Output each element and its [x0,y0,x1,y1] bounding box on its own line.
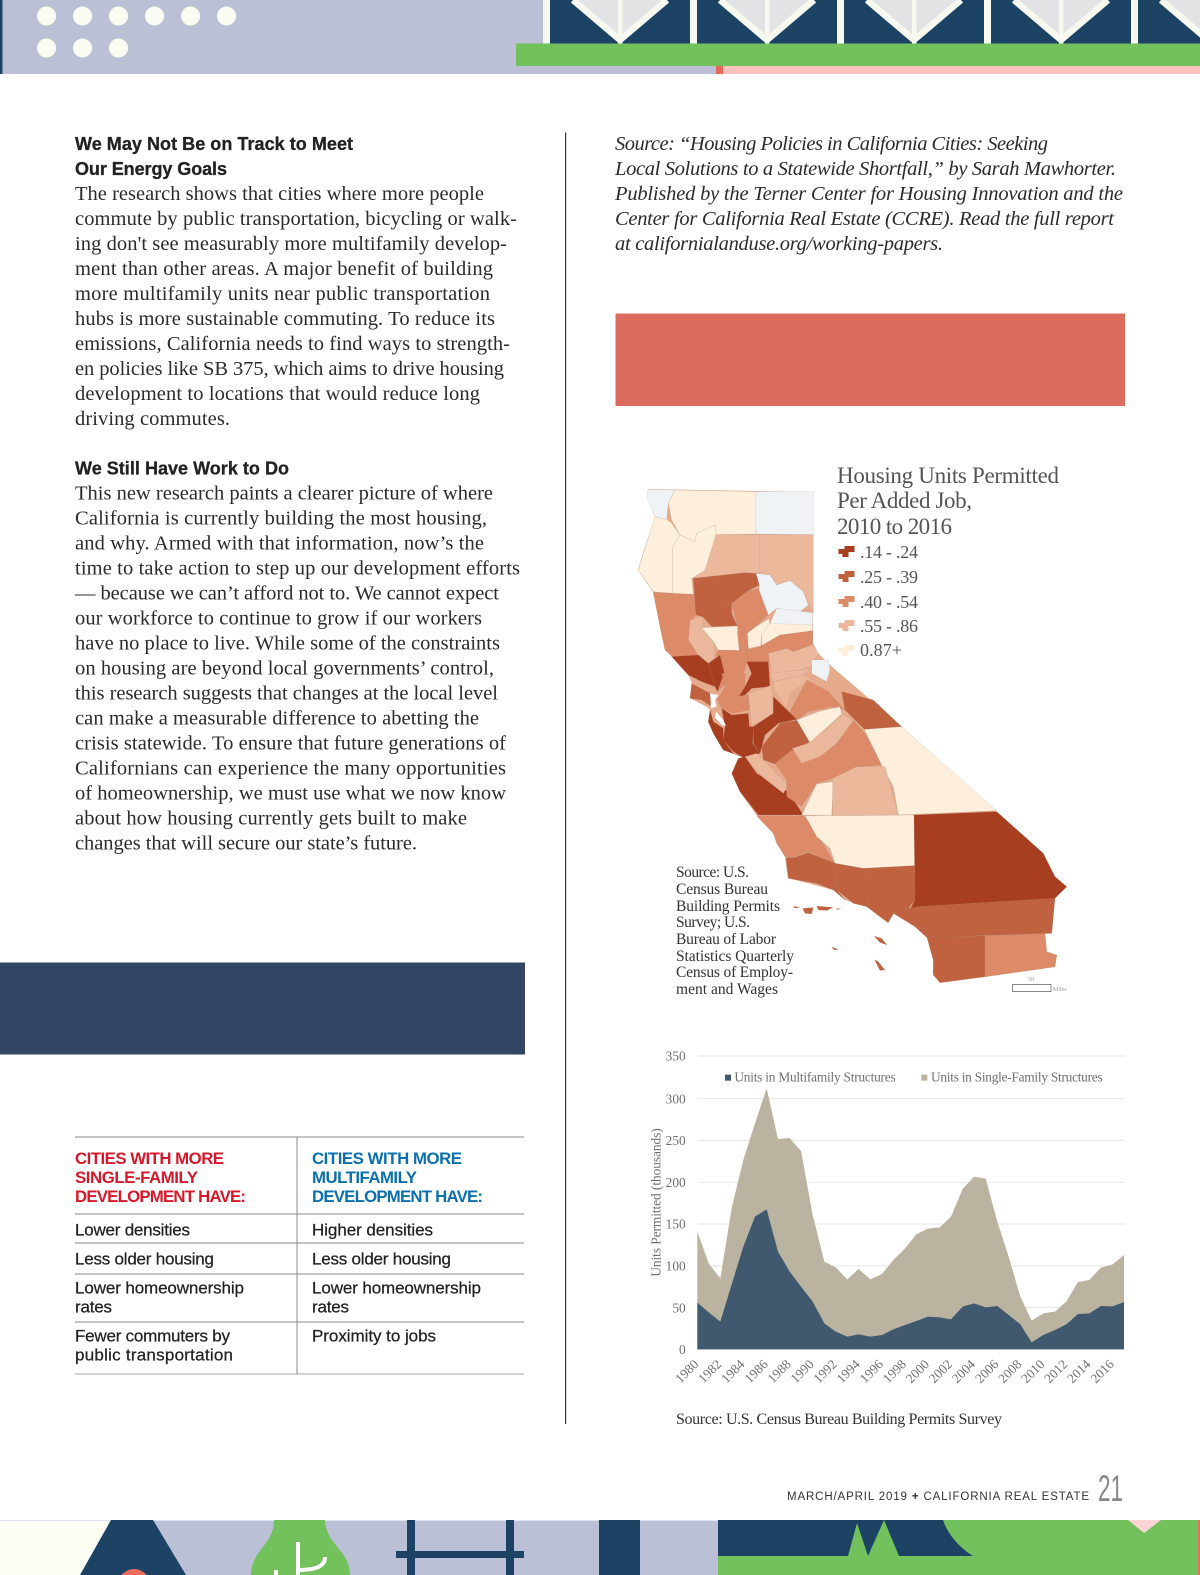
x axis labels: 2010 [1018,1356,1048,1386]
multifamily area [697,1209,1124,1349]
map title [837,463,1060,539]
southern counties [757,692,1067,983]
folio line [787,1468,1123,1509]
article column: energy goals: We May Not Be on Track to Meet [75,134,353,154]
article column: work to do: crisis statewide. To ensure that future generations of [75,732,506,754]
map title: Housing Units Permitted [837,463,1060,488]
x axis labels [672,1356,1117,1386]
article column: work to do: about how housing currently gets built to make [75,808,467,830]
map legend: .40 - .54 [860,592,918,612]
California county map [638,489,1067,983]
y axis title: Units Permitted (thousands) [649,1128,664,1277]
x axis labels: 1996 [857,1356,886,1386]
chart legend: Units in Single-Family Structures [931,1070,1103,1085]
article column: energy goals: driving commutes. [75,408,230,430]
article column: energy goals: Our Energy Goals [75,159,227,179]
article column: energy goals: emissions, California needs to find ways to strength- [75,333,510,355]
comparison table: MULTIFAMILY [312,1168,417,1187]
article column: energy goals: hubs is more sustainable commuting. To reduce its [75,308,495,330]
green hills [718,1520,1200,1575]
article column: work to do: on housing are beyond local governments’ control, [75,658,494,680]
x axis labels: 1994 [833,1356,863,1386]
x axis labels: 2014 [1064,1356,1094,1386]
article column: energy goals: en policies like SB 375, which aims to drive housing [75,358,504,380]
x axis labels: 1998 [880,1356,909,1386]
comparison table: rates [75,1298,112,1316]
map source note: ment and Wages [676,981,778,998]
source citation: Source: “Housing Policies in California Cities: Seeking [615,133,1048,155]
article column: work to do: have no place to live. While some of the constraints [75,632,500,654]
area chart: units permitted [649,1049,1124,1386]
map source note: Building Permits [676,898,780,915]
single-family area [697,1088,1124,1349]
icon: house triangle [80,1520,186,1575]
x axis labels: 1982 [695,1357,724,1386]
y axis labels: 200 [666,1175,686,1190]
x axis labels: 1984 [718,1356,748,1386]
map title: Per Added Job, [837,488,972,513]
map legend: .14 - .24 [860,542,918,562]
article column: energy goals: development to locations that would reduce long [75,383,480,405]
article column: work to do: — because we can’t afford not to. We cannot expect [74,582,499,604]
article column: work to do: can make a measurable difference to abetting the [75,708,479,730]
x axis labels: 2012 [1041,1357,1070,1386]
comparison table: Lower homeownership [75,1278,244,1298]
y axis labels: 350 [666,1049,686,1064]
navy panel [0,962,525,1054]
map title: 2010 to 2016 [837,514,952,539]
article column: work to do [74,458,520,854]
y axis labels: 0 [679,1342,686,1357]
source citation [614,133,1123,255]
x axis labels: 1990 [787,1356,817,1386]
x axis labels: 2004 [949,1356,978,1386]
map source note: Statistics Quarterly [676,948,794,965]
article column: work to do: time to take action to step up our development efforts [75,558,520,580]
source citation: Center for California Real Estate (CCRE). Read the full report [615,208,1115,230]
article column: work to do: This new research paints a clearer picture of where [75,482,493,504]
comparison table: Less older housing [75,1250,214,1268]
comparison table: Lower homeownership [312,1278,481,1298]
map legend: .25 - .39 [860,567,918,587]
top decorative banner [0,0,1200,74]
map scale bar: Miles [1053,987,1067,993]
map source note: Bureau of Labor [676,931,777,948]
coral panel [616,314,1125,406]
article column: work to do: We Still Have Work to Do [75,458,289,478]
y axis labels: 50 [672,1300,686,1315]
comparison table [75,1136,524,1374]
map source note: Census of Employ- [676,964,793,981]
bottom decorative banner [0,1520,1200,1575]
y axis labels: 150 [666,1217,686,1232]
y axis labels [666,1049,686,1357]
comparison table: SINGLE-FAMILY [75,1168,198,1187]
state silhouette [638,489,1067,983]
article column: work to do: of homeownership, we must use what we now know [75,782,506,804]
chart legend [725,1070,1103,1085]
comparison table: public transportation [75,1346,233,1364]
map source note [676,864,794,998]
map legend: .55 - .86 [860,616,918,636]
source citation: at californialanduse.org/working-papers. [615,233,943,255]
source citation: Published by the Terner Center for Housing Innovation and the [614,183,1123,205]
map source note: Survey; U.S. [676,914,750,931]
x axis labels: 1992 [810,1357,840,1386]
article column: energy goals: more multifamily units near public transportation [75,283,490,305]
map source note: Source: U.S. [676,864,749,881]
article column: work to do: our workforce to continue to grow if our workers [75,608,482,630]
comparison table: CITIES WITH MORE [312,1149,462,1168]
chart source note: Source: U.S. Census Bureau Building Permits Survey [676,1411,1002,1428]
map scale bar: 50 [1028,977,1034,983]
comparison table: Higher densities [312,1220,433,1240]
article column: energy goals: commute by public transportation, bicycling or walk- [75,208,517,230]
x axis labels: 2002 [926,1357,955,1386]
chart legend: Units in Multifamily Structures [734,1070,896,1085]
comparison table: DEVELOPMENT HAVE: [75,1187,246,1206]
article column: work to do: this research suggests that changes at the local level [75,682,498,704]
comparison table: Lower densities [75,1220,190,1240]
article column: energy goals: The research shows that cities where more people [75,183,484,205]
comparison table: Fewer commuters by [75,1326,230,1346]
comparison table: DEVELOPMENT HAVE: [312,1187,483,1206]
article column: work to do: Californians can experience the many opportunities [75,758,506,780]
map legend [838,542,918,660]
article column: energy goals [75,134,517,430]
x axis labels: 1986 [741,1356,771,1386]
article column: work to do: California is currently building the most housing, [75,508,487,530]
map scale bar [1012,977,1067,993]
x axis labels: 2000 [903,1356,932,1386]
central counties [708,660,845,815]
x axis labels: 1980 [672,1356,702,1386]
article column: work to do: changes that will secure our state’s future. [75,832,417,854]
y axis labels: 250 [666,1133,686,1148]
article column: work to do: and why. Armed with that information, now’s the [75,532,484,554]
icon: ladder [396,1520,524,1575]
folio line: MARCH/APRIL 2019 + CALIFORNIA REAL ESTATE [787,1491,1089,1503]
article column: energy goals: ing don't see measurably more multifamily develop- [75,233,507,255]
article column: energy goals: ment than other areas. A major benefit of building [75,258,493,280]
comparison table: rates [312,1298,349,1316]
northern counties [638,489,818,708]
comparison table: Proximity to jobs [312,1326,436,1346]
y axis labels: 100 [666,1259,686,1274]
x axis labels: 2006 [972,1356,1002,1386]
x axis labels: 1988 [764,1356,794,1386]
comparison table: CITIES WITH MORE [75,1149,224,1168]
y axis labels: 300 [666,1091,686,1106]
x axis labels: 2008 [995,1356,1025,1386]
source citation: Local Solutions to a Statewide Shortfall,” by Sarah Mawhorter. [614,158,1116,180]
map source note: Census Bureau [676,881,768,898]
x axis labels: 2016 [1087,1356,1117,1386]
folio line: 21 [1098,1468,1123,1509]
map legend: 0.87+ [860,640,902,660]
comparison table: Less older housing [312,1250,451,1268]
icon: cactus tree [251,1520,350,1575]
